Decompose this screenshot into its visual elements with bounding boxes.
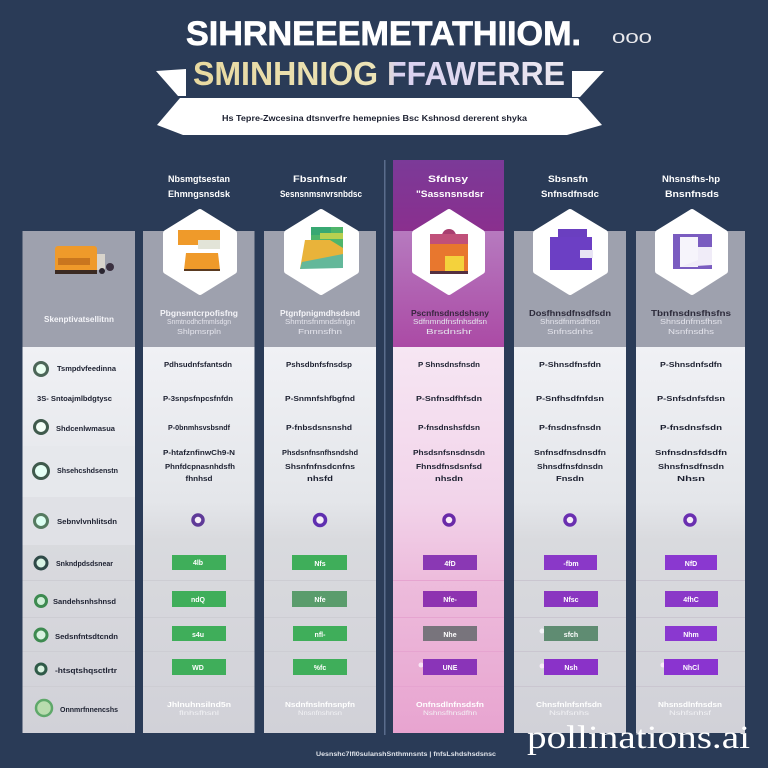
- icon: orange store: [430, 229, 468, 274]
- feature rows: 3S- Sntoajmlbdgtysc: [37, 394, 112, 403]
- plan values: Snfnsdnsfdsdfn: [655, 448, 728, 457]
- subtitle: SMINHNIOG FFAWERRE: [193, 55, 565, 92]
- button: 2: [665, 591, 718, 607]
- feature rows: -htsqtshqsctlrtr: [55, 666, 117, 675]
- watermark: pollinations.ai: [527, 720, 750, 756]
- plan description: [411, 309, 490, 336]
- button: 3: nfl-: [315, 632, 326, 639]
- button: 2: Nfsc: [563, 597, 579, 604]
- plan values: P-Snfhsdfnfdsn: [536, 394, 605, 403]
- plan description: Sdfnmndfnsfnhsdfsn: [413, 319, 487, 326]
- button: 3: [293, 626, 347, 641]
- plan values: Shnsfnsdfnsdn: [658, 462, 724, 471]
- button: 4: NhCl: [683, 665, 699, 672]
- plan footnote: [658, 700, 722, 717]
- plan footnote: [536, 700, 602, 717]
- plan description: Fnmnsfhn: [298, 329, 342, 336]
- plan description: Nsnfnsdhs: [668, 329, 715, 336]
- button: 1: 4fD: [444, 561, 456, 568]
- panel: plan 1: [143, 174, 254, 733]
- plan values: [282, 360, 358, 483]
- plan description: Shnsdfnmsdfhsn: [540, 319, 600, 326]
- plan footnote: flnhsfhsnl: [179, 711, 219, 717]
- button: 3: [172, 626, 226, 641]
- button: 2: Nfe: [314, 597, 326, 604]
- plan footnote: Nsdnfnslnfnsnpfn: [285, 700, 355, 709]
- plan values: P-3snpsfnpcsfnfdn: [163, 394, 233, 403]
- plan values: P-0bnmhsvsbsndf: [168, 423, 230, 432]
- plan name: Nbsmgtsestan: [168, 174, 230, 184]
- plan values: Fhnsdfnsdsnfsd: [416, 462, 482, 471]
- button: 3: s4u: [192, 632, 204, 639]
- button: 2: [423, 591, 477, 607]
- button: 3: [665, 626, 717, 641]
- plan values: P-fnsdnshsfdsn: [418, 423, 480, 432]
- button: 3: Nhm: [683, 632, 699, 639]
- plan values: Pdhsudnfsfantsdn: [164, 360, 232, 369]
- icon: status ring: [444, 515, 454, 525]
- plan footnote: Jhlnuhnsilnd5n: [167, 700, 231, 709]
- plan footnote: [285, 700, 355, 717]
- button: 1: [172, 555, 226, 570]
- plan description: [160, 309, 238, 336]
- plan footnote: Nshfsnhsf: [669, 711, 712, 717]
- plan values: P-fnsdnsfnsdn: [539, 423, 601, 432]
- plan name: [280, 174, 362, 199]
- plan values: Shsnfnfnsdcnfns: [285, 462, 355, 471]
- plan footnote: Nshfsnhs: [549, 711, 589, 717]
- plan description: Ptgnfpnigmdhsdsnd: [280, 309, 360, 318]
- button: 4: Nsh: [564, 665, 578, 672]
- icon: green folder: [300, 227, 343, 269]
- plan description: [280, 309, 360, 336]
- icon: orange truck: [55, 246, 114, 274]
- button: 1: [665, 555, 717, 570]
- plan values: P-Snmnfshfbgfnd: [285, 394, 355, 403]
- plan values: nhsfd: [307, 474, 334, 483]
- button: 2: [292, 591, 347, 607]
- plan description: Shlpmsrpln: [177, 329, 221, 336]
- feature rows: Sebnvlvnhlitsdn: [57, 517, 117, 526]
- button: 4: [293, 659, 347, 675]
- plan footnote: Chnsfnlnfsnfsdn: [536, 700, 602, 709]
- plan description: Dosfhnsdfnsdfsdn: [529, 309, 611, 318]
- plan name: [168, 174, 231, 199]
- feature rows: Snkndpdsdsnear: [56, 559, 113, 568]
- hexagon badge: [536, 212, 605, 292]
- plan name: Fbsnfnsdr: [293, 174, 348, 184]
- plan description: Brsdnshr: [426, 329, 473, 336]
- panel: plan 3 highlighted: [393, 160, 504, 733]
- button: 1: [544, 555, 597, 570]
- icon: status ring: [314, 514, 326, 526]
- plan values: [534, 360, 606, 483]
- button: 3: sfch: [564, 632, 578, 639]
- plan footnote: [416, 700, 484, 717]
- plan footnote: Nshnsfhnsdfhn: [423, 711, 477, 717]
- plan values: Phsdsnfnsnfhsndshd: [282, 448, 358, 457]
- feature rows: Onnmrfnnencshs: [60, 705, 118, 714]
- plan name: "Sassnsnsdsr: [416, 189, 485, 199]
- plan description: Snfnsdnhs: [547, 329, 594, 336]
- plan values: Phsdsnfsnsdnsdn: [413, 448, 485, 457]
- plan values: P-fnbsdsnsnshd: [286, 423, 352, 432]
- hexagon badge: [166, 212, 234, 292]
- plan values: P-Shnsdfnsfdn: [539, 360, 601, 369]
- panel: plan 4: [514, 174, 626, 733]
- plan values: P Shnsdnsfnsdn: [418, 360, 480, 369]
- button: 1: NfD: [685, 561, 697, 568]
- icon: purple document: [673, 234, 712, 269]
- button: 1: -fbm: [563, 561, 579, 568]
- plan footnote: [167, 700, 231, 717]
- feature rows: [34, 362, 118, 716]
- icon: purple box: [550, 229, 593, 270]
- plan name: Ehmngsnsdsk: [168, 189, 231, 199]
- button: 4: [540, 659, 598, 675]
- button: 2: [172, 591, 226, 607]
- feature rows: Sandehsnhshnsd: [53, 597, 116, 606]
- plan description: Pbgnsmtcrpofisfng: [160, 309, 238, 318]
- button: 4: WD: [192, 665, 204, 672]
- plan values: fhnhsd: [186, 474, 213, 483]
- plan values: P-htafznfinwCh9-N: [163, 448, 235, 457]
- plan values: Snfnsdfnsdnsdfn: [534, 448, 606, 457]
- plan footnote: Onfnsdlnfnsdsfn: [416, 700, 484, 709]
- plan values: Fnsdn: [556, 474, 585, 483]
- plan description: Shmtnsfnmndsfnlgn: [285, 319, 355, 326]
- plan name: Snfnsdfnsdc: [541, 189, 599, 199]
- panel: feature labels column: [22, 231, 135, 733]
- button: 3: [423, 626, 477, 641]
- title: 000: [612, 30, 652, 47]
- icon: orange box: [178, 230, 220, 271]
- plan name: Sbsnsfn: [548, 174, 588, 184]
- button: 4: [172, 659, 226, 675]
- panel: plan 5: [636, 174, 745, 733]
- button: 3: [540, 626, 598, 641]
- plan description: Tbnfnsdnsfhsfns: [651, 309, 732, 318]
- plan values: P-Shnsdnfsdfn: [660, 360, 722, 369]
- plan name: Sfdnsy: [428, 174, 468, 184]
- button: 3: Nhe: [443, 632, 457, 639]
- icon: status ring: [565, 515, 575, 525]
- feature rows: Shdcenlwmasua: [56, 424, 116, 433]
- plan values: [163, 360, 235, 483]
- plan values: Nhsn: [677, 474, 706, 483]
- button: 2: [544, 591, 598, 607]
- title: SIHRNEEEMETATHIIOM.: [186, 15, 581, 53]
- plan values: nhsdn: [435, 474, 464, 483]
- hexagon badge: [658, 212, 725, 292]
- plan values: P-Snfsdnfsfdsn: [657, 394, 726, 403]
- panel: plan 2: [264, 174, 376, 733]
- plan name: [662, 174, 721, 199]
- hexagon badge: [287, 212, 356, 292]
- label: plan feature: Skenptivatsellitnn: [44, 315, 114, 324]
- plan description: Pscnfnsdnsdshsny: [411, 309, 490, 318]
- plan description: Snmtnodhcfmmlsdgn: [167, 319, 231, 326]
- button: 4: [418, 659, 477, 675]
- feature rows: Sedsnfntsdtcndn: [55, 632, 118, 641]
- plan footnote: Nhsnsdlnfnsdsn: [658, 700, 722, 709]
- button: 2: ndQ: [191, 597, 206, 604]
- button: 4: UNE: [443, 665, 458, 672]
- banner tagline: Hs Tepre-Zwcesina dtsnverfre hemepnies Bsc Kshnosd dererent shyka: [222, 113, 527, 123]
- button: 1: Nfs: [314, 561, 326, 568]
- divider line: [384, 160, 386, 735]
- button: 1: 4lb: [193, 560, 203, 567]
- banner ribbon: [156, 55, 604, 135]
- plan values: P-fnsdnsfsdn: [660, 423, 723, 432]
- plan values: [655, 360, 728, 483]
- plan values: P-Snfnsdfhfsdn: [416, 394, 482, 403]
- button: 4: [660, 659, 718, 675]
- plan description: [651, 309, 732, 336]
- plan description: [529, 309, 611, 336]
- button: 1: [292, 555, 347, 570]
- plan values: Shnsdfnsfdnsdn: [537, 462, 603, 471]
- icon: status ring: [193, 515, 203, 525]
- plan name: [416, 174, 485, 199]
- icon: status ring: [685, 515, 695, 525]
- plan description: Shnsdnfmsfhsn: [660, 319, 722, 326]
- plan name: [541, 174, 599, 199]
- button: 2: 4fhC: [683, 597, 699, 604]
- plan values: Pshsdbnfsfnsdsp: [286, 360, 352, 369]
- plan name: Sesnsnmsnvrsnbdsc: [280, 189, 362, 199]
- plan name: Bnsnfnsds: [665, 189, 719, 199]
- plan values: [413, 360, 485, 483]
- feature rows: Shsehcshdsenstn: [57, 466, 118, 475]
- feature rows: Tsmpdvfeedinna: [57, 364, 117, 373]
- footer note: Uesnshc7lfl0sulanshSnthmnsnts | fnfsLshdshsdsnsc: [316, 751, 496, 758]
- plan values: Phnfdcpnasnhdsfh: [165, 462, 235, 471]
- plan footnote: Nnsnfnshnsn: [298, 711, 342, 717]
- hexagon badge: [415, 212, 482, 292]
- plan name: Nhsnsfhs-hp: [662, 174, 721, 184]
- button: 4: %fc: [314, 665, 326, 672]
- button: 2: Nfe-: [443, 597, 457, 604]
- button: 1: [423, 555, 477, 570]
